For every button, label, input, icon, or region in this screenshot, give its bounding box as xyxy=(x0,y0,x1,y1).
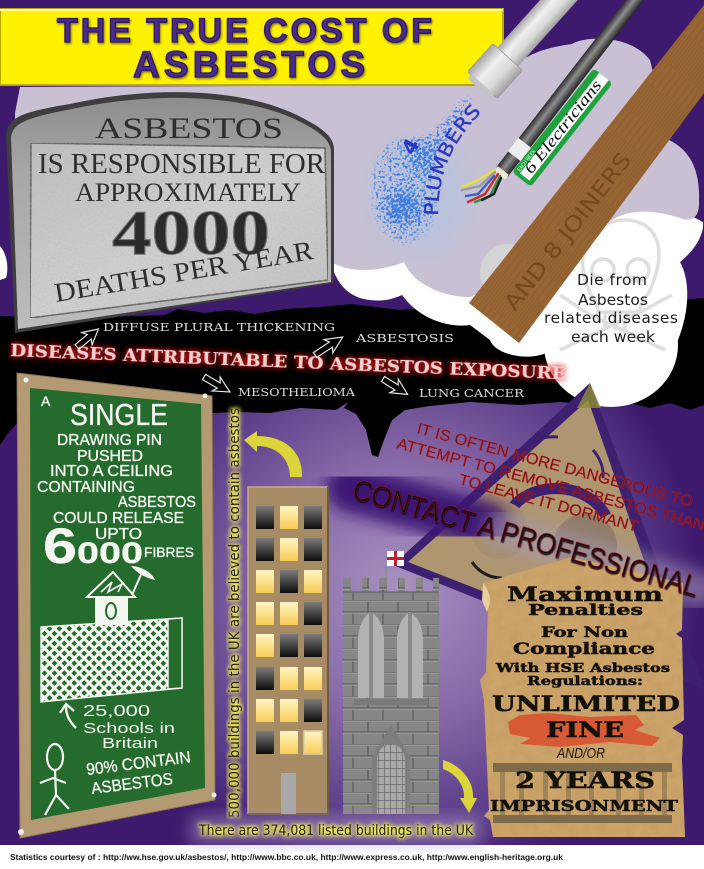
disease labels: MESOTHELIOMA xyxy=(238,385,356,399)
tombstone xyxy=(6,92,334,333)
heading: diseases attributable to asbestos exposure: DISEASES ATTRIBUTABLE TO ASBESTOS EXPOSURE xyxy=(10,341,566,384)
cable label: each week 6 electricians: 6 Electricians xyxy=(521,77,605,177)
parchment text: Penalties xyxy=(528,601,643,619)
chalk arrow and school count xyxy=(60,703,175,752)
tombstone text: APPROXIMATELY xyxy=(75,178,301,207)
parchment text: FINE xyxy=(546,717,624,742)
disease labels: ASBESTOSIS xyxy=(355,331,454,345)
parchment text: Maximum xyxy=(507,582,663,606)
label: 4 plumbers: PLUMBERS xyxy=(424,104,480,214)
chalk text: single drawing pin: A xyxy=(41,393,51,409)
chalk text: single drawing pin: ASBESTOS xyxy=(118,494,196,511)
chalk text: single drawing pin: 6 xyxy=(43,518,77,574)
tombstone text: ASBESTOS xyxy=(95,112,283,145)
chalk text: single drawing pin: SINGLE xyxy=(70,397,168,432)
cable label: each week 6 electricians xyxy=(512,68,613,187)
cable: electricians xyxy=(462,0,649,202)
footer: sources: Statistics courtesy of : http://ww.hse.gov.uk/asbestos/, http://www.bbc.co.uk, http://www.express.co.uk, http:/www.english-heritage.org.uk xyxy=(10,852,563,862)
chalk arrow and school count: Schools in xyxy=(83,720,175,737)
chalk text: 90% contain asbestos xyxy=(85,748,192,798)
parchment text: Compliance xyxy=(513,639,655,658)
tombstone text: IS RESPONSIBLE FOR xyxy=(38,149,325,180)
castle tower: listed building xyxy=(343,551,439,814)
chalk text: single drawing pin: COULD RELEASE xyxy=(53,510,184,527)
biohazard symbol xyxy=(471,437,617,578)
chalk drawing: school xyxy=(41,566,182,702)
windows xyxy=(256,506,322,754)
parchment text: IMPRISONMENT xyxy=(490,797,679,815)
cable label: each week 6 electricians: EACH WEEK xyxy=(517,149,538,173)
cloud backdrop xyxy=(0,39,703,380)
chalk text: single drawing pin: PUSHED xyxy=(77,448,143,465)
title banner xyxy=(0,9,503,85)
warning text: it is often more dangerous: IT IS OFTEN MORE DANGEROUS TO xyxy=(415,420,695,511)
text: die from asbestos related diseases each week: each week xyxy=(571,328,655,346)
chalk arrow and school count: 25,000 xyxy=(83,703,150,720)
warning text: it is often more dangerous: ATTEMPT TO REMOVE ASBESTOS THAN xyxy=(395,435,704,534)
vertical text: 500,000 buildings: 500,000 buildings in the UK are believed to contain asbestos xyxy=(227,408,243,818)
wooden plank: joiners xyxy=(469,5,704,343)
pipe: plumbers xyxy=(464,0,600,102)
chalk text: single drawing pin: DRAWING PIN xyxy=(57,432,162,449)
plank text: AND 8 JOINERS xyxy=(500,148,637,316)
label: 4 plumbers xyxy=(397,104,480,214)
chalk text: single drawing pin: INTO A CEILING xyxy=(50,463,173,480)
chalk stick figure xyxy=(40,744,69,815)
blue spray xyxy=(363,79,489,253)
title text: ASBESTOS xyxy=(133,44,365,85)
parchment text: Regulations: xyxy=(527,674,643,688)
tombstone text: 4000 xyxy=(112,197,270,268)
halo behind contact text xyxy=(350,488,700,590)
disease labels xyxy=(103,320,524,400)
parchment: maximum penalties xyxy=(480,557,685,837)
skull and crossbones xyxy=(560,220,672,350)
disease labels: LUNG CANCER xyxy=(419,386,524,400)
text: 374,081 listed buildings: There are 374,081 listed buildings in the UK xyxy=(198,823,474,839)
text: die from asbestos related diseases each week xyxy=(544,271,678,346)
text: die from asbestos related diseases each week: Die from xyxy=(577,271,647,289)
chalk text: single drawing pin xyxy=(37,393,196,574)
chalk text: single drawing pin: 000 xyxy=(77,537,143,570)
and/or: AND/OR xyxy=(556,745,605,762)
frayed wires xyxy=(462,170,501,202)
title text: THE TRUE COST OF xyxy=(57,12,432,50)
parchment text xyxy=(490,582,680,815)
chalk text: single drawing pin: CONTAINING xyxy=(37,479,135,496)
yellow arrow to listed building xyxy=(443,760,477,813)
tombstone text xyxy=(38,112,325,308)
red fine splat xyxy=(508,713,660,747)
arched windows xyxy=(354,612,428,705)
white footer strip xyxy=(0,845,704,869)
disease labels: DIFFUSE PLURAL THICKENING xyxy=(103,320,335,334)
chalk arrow and school count: Britain xyxy=(102,735,158,752)
chalk text: 90% contain asbestos: ASBESTOS xyxy=(90,770,174,798)
black jagged band xyxy=(0,298,704,457)
warning triangle: biohazard xyxy=(393,383,704,690)
arched portcullis door xyxy=(372,725,410,814)
title text xyxy=(57,12,432,85)
chalk text: single drawing pin: UPTO xyxy=(95,526,142,543)
warning text: it is often more dangerous: TO LEAVE IT DORMANT xyxy=(457,471,641,536)
tombstone face xyxy=(30,143,328,318)
tombstone text: DEATHS PER YEAR xyxy=(52,235,315,308)
prison bars xyxy=(493,763,672,823)
parchment text: For Non xyxy=(541,625,628,641)
yellow arrow to tower block xyxy=(244,431,302,477)
parchment text: 2 YEARS xyxy=(515,768,655,794)
parchment text: UNLIMITED xyxy=(492,691,680,716)
skull speech bubble xyxy=(544,220,678,407)
text: die from asbestos related diseases each week: Asbestos xyxy=(578,291,648,309)
english flag xyxy=(386,551,404,578)
chalkboard xyxy=(17,373,216,838)
label: 4 plumbers: 4 xyxy=(397,134,424,158)
text: 374,081 listed buildings xyxy=(190,816,482,844)
text: die from asbestos related diseases each week: related diseases xyxy=(544,309,678,327)
chalk text: 90% contain asbestos: 90% CONTAIN xyxy=(85,748,192,779)
tower block xyxy=(248,487,328,814)
parchment text: With HSE Asbestos xyxy=(495,661,670,675)
arrows to disease labels xyxy=(72,323,412,401)
chalk text: single drawing pin: FIBRES xyxy=(144,544,194,560)
